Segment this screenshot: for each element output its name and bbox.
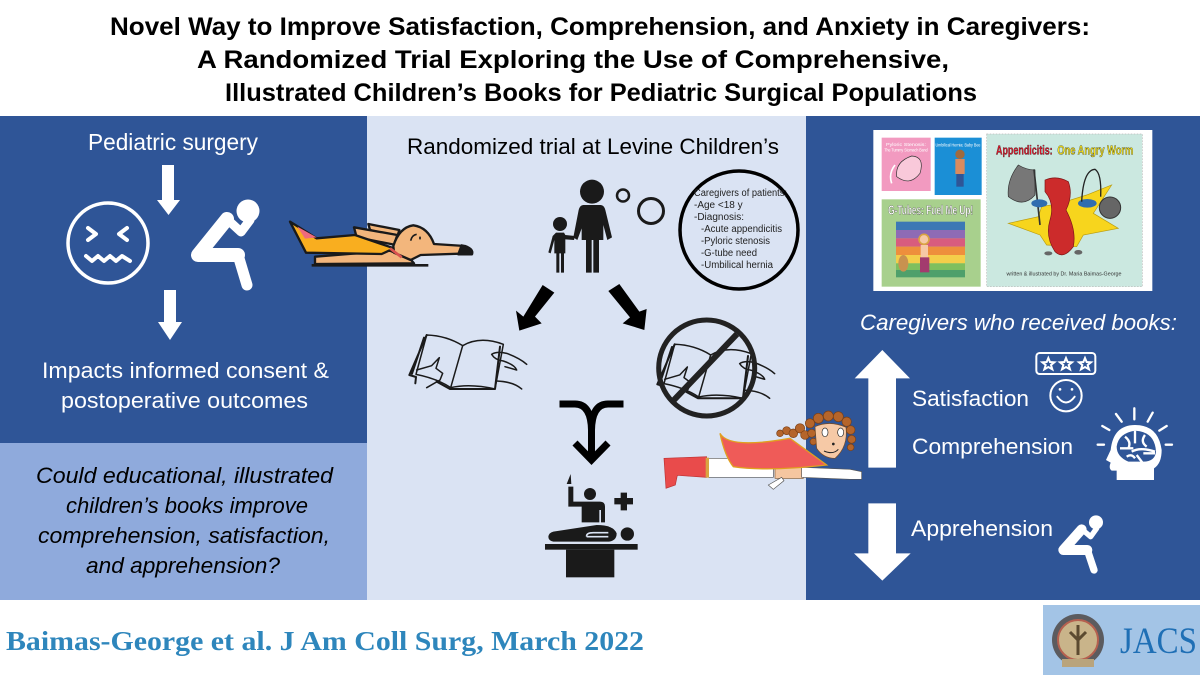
illustration: flying dog with cape (290, 222, 472, 265)
book cover: g-tubes (882, 199, 981, 287)
icon: thought bubble small (617, 190, 629, 202)
icon: thought bubble medium (638, 198, 664, 224)
citation: Baimas-George et al. J Am Coll Surg, March 2022 (6, 626, 644, 656)
icon: star rating and smile (1036, 353, 1095, 411)
image: book covers (873, 130, 1152, 291)
heading: randomized trial: Randomized trial at Levine Children’s (407, 134, 779, 159)
heading: pediatric surgery: Pediatric surgery (88, 129, 258, 155)
book cover: pyloric stenosis (882, 138, 931, 191)
text: research question: children’s books improve (66, 493, 308, 518)
book cover: appendicitis: Appendicitis: (996, 143, 1053, 157)
text: impacts (42, 358, 329, 413)
book cover: umbilical hernia (935, 138, 982, 195)
book cover: pyloric stenosis: Pyloric Stenosis: (886, 142, 926, 147)
arrow: anxiety down to impacts (158, 290, 182, 340)
callout: inclusion criteria: Caregivers of patients: (694, 188, 787, 199)
arrow: decreased (854, 503, 911, 581)
text: research question: comprehension, satisfaction, (38, 523, 330, 548)
callout: inclusion criteria: -G-tube need (701, 248, 757, 259)
logo: JACS (1043, 605, 1200, 675)
arrow: to no-book group (608, 284, 647, 330)
text: impacts: Impacts informed consent & (42, 358, 329, 383)
book cover: appendicitis (987, 134, 1142, 287)
panel: research question (0, 443, 367, 600)
icon: brain in head (1098, 408, 1172, 480)
icon: anxious seated person (198, 200, 260, 285)
text: impacts: postoperative outcomes (61, 388, 308, 413)
icon: apprehensive seated person (1063, 515, 1103, 570)
icon: open book with hands (409, 335, 527, 389)
book cover: umbilical hernia: Umbilical Hernia: Baby Bee (935, 143, 981, 148)
book cover: g-tubes: G-Tubes: Fuel Me Up! (888, 204, 973, 218)
icon: no book (657, 320, 775, 416)
title: A Randomized Trial Exploring the Use of Comprehensive, (197, 46, 949, 74)
book cover: pyloric stenosis: The Tummy Stomach Band (884, 148, 928, 153)
book cover: appendicitis: written & illustrated by Dr. Maria Baimas-George (1006, 271, 1121, 277)
arrow: groups merge to surgery (560, 404, 624, 460)
panel: results (806, 116, 1200, 600)
text: research question: and apprehension? (86, 553, 281, 578)
callout: inclusion criteria (680, 171, 798, 289)
panel: randomized trial (367, 116, 806, 600)
book cover: appendicitis: One Angry Worm (1057, 143, 1133, 157)
icon: parent and child (548, 180, 612, 273)
callout: inclusion criteria: -Diagnosis: (694, 212, 744, 223)
icon: surgeon operating on patient (545, 474, 638, 577)
label: comprehension: Comprehension (912, 434, 1073, 459)
label: apprehension: Apprehension (911, 516, 1053, 541)
panel: background problem (0, 116, 367, 443)
arrow: to book group (516, 285, 554, 331)
text: research question: Could educational, illustrated (36, 463, 334, 488)
callout: inclusion criteria: -Umbilical hernia (701, 260, 773, 271)
icon: anxious face (68, 203, 148, 283)
title: Novel Way to Improve Satisfaction, Comprehension, and Anxiety in Caregivers: (110, 13, 1090, 41)
heading: caregivers who received books: Caregivers who received books: (860, 310, 1177, 335)
label: satisfaction: Satisfaction (912, 386, 1029, 411)
title (110, 13, 1090, 107)
arrow: increased (855, 350, 910, 468)
callout: inclusion criteria: -Age <18 y (694, 200, 743, 211)
callout: inclusion criteria: -Acute appendicitis (701, 224, 782, 235)
text: research question (36, 463, 334, 578)
callout: inclusion criteria: -Pyloric stenosis (701, 236, 770, 247)
illustration: flying girl superhero (664, 411, 862, 489)
title: Illustrated Children’s Books for Pediatric Surgical Populations (225, 79, 977, 107)
arrow: surgery down to anxiety (157, 165, 180, 215)
